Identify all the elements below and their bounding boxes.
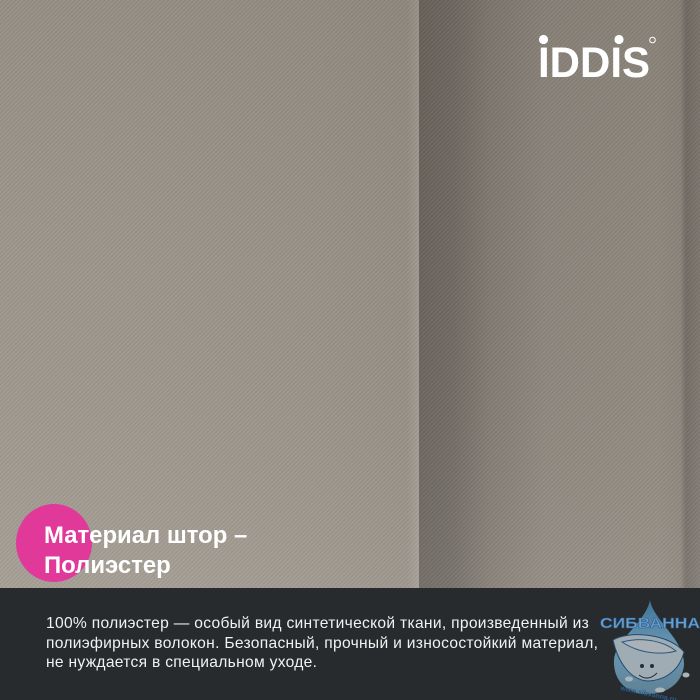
text block: description <box>46 615 598 671</box>
text block: description: 100% полиэстер — особый вид синтетической ткани, произведенный из <box>46 615 589 632</box>
text block: description: полиэфирных волокон. Безопасный, прочный и износостойкий материал, <box>46 635 598 652</box>
heading: Материал штор – <box>44 522 247 549</box>
text block: description: не нуждается в специальном уходе. <box>46 654 317 671</box>
label: brand name: СИБВАННА <box>600 615 700 632</box>
icon: water drop <box>614 600 684 694</box>
icon: watermark СИБВАННА <box>600 600 700 700</box>
icon: pink circle behind heading <box>16 504 92 582</box>
heading <box>44 522 247 579</box>
panel: dark description bar <box>0 588 700 700</box>
icon: bathtub <box>613 635 690 692</box>
heading: Полиэстер <box>44 552 171 579</box>
